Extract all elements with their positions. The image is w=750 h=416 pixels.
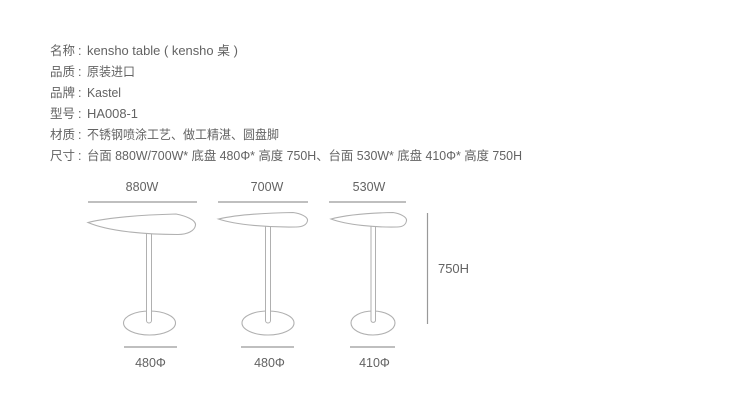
spec: quality: 原装进口	[87, 65, 135, 79]
base ellipse	[124, 311, 176, 335]
base dimension line	[124, 346, 177, 348]
spec: model: :	[78, 107, 81, 121]
spec: model: HA008-1	[87, 107, 138, 121]
spec: quality: 品质	[50, 65, 75, 79]
spec: quality: :	[78, 65, 81, 79]
base dimension line	[241, 346, 294, 348]
height label 750H: 750H	[438, 262, 469, 276]
pole	[371, 225, 376, 322]
spec: material: 不锈钢喷涂工艺、做工精湛、圆盘脚	[87, 127, 279, 142]
spec: brand	[50, 85, 121, 100]
height dimension line	[426, 213, 428, 324]
diagram: 530W table	[329, 180, 407, 370]
spec: dimensions: 尺寸	[50, 149, 75, 163]
base label 480Φ: 480Φ	[135, 356, 166, 370]
width dimension line	[88, 201, 197, 203]
spec: brand: 品牌	[50, 85, 75, 100]
spec: quality	[50, 65, 135, 79]
pole	[146, 232, 152, 323]
spec: name: :	[78, 44, 81, 58]
pole	[266, 225, 270, 323]
width dimension line	[218, 201, 308, 203]
table top	[88, 214, 196, 234]
table top	[331, 212, 407, 227]
spec: name: 名称	[50, 43, 75, 58]
diagram: 700W table	[218, 180, 308, 370]
height dimension	[428, 213, 469, 324]
spec: name: kensho table ( kensho 桌 )	[87, 44, 238, 58]
spec: model: 型号	[50, 107, 75, 121]
table top	[218, 212, 308, 227]
product specification text block	[50, 43, 522, 163]
diagram: 880W table	[88, 180, 197, 370]
spec: material: 材质	[50, 128, 75, 142]
spec: brand: :	[78, 86, 81, 100]
width label 530W: 530W	[353, 180, 386, 194]
base label 410Φ: 410Φ	[359, 356, 390, 370]
spec: dimensions: :	[78, 149, 81, 163]
spec: dimensions: 台面 880W/700W* 底盘 480Φ* 高度 750H、台面 530W* 底盘 410Φ* 高度 750H	[87, 148, 522, 163]
base ellipse	[351, 311, 395, 335]
width dimension line	[329, 201, 406, 203]
width label 700W: 700W	[251, 180, 284, 194]
spec: brand: Kastel	[87, 86, 121, 100]
base label 480Φ: 480Φ	[254, 356, 285, 370]
base dimension line	[350, 346, 395, 348]
width label 880W: 880W	[126, 180, 159, 194]
base ellipse	[242, 311, 294, 335]
spec: model	[50, 107, 138, 121]
spec: material: :	[78, 128, 81, 142]
